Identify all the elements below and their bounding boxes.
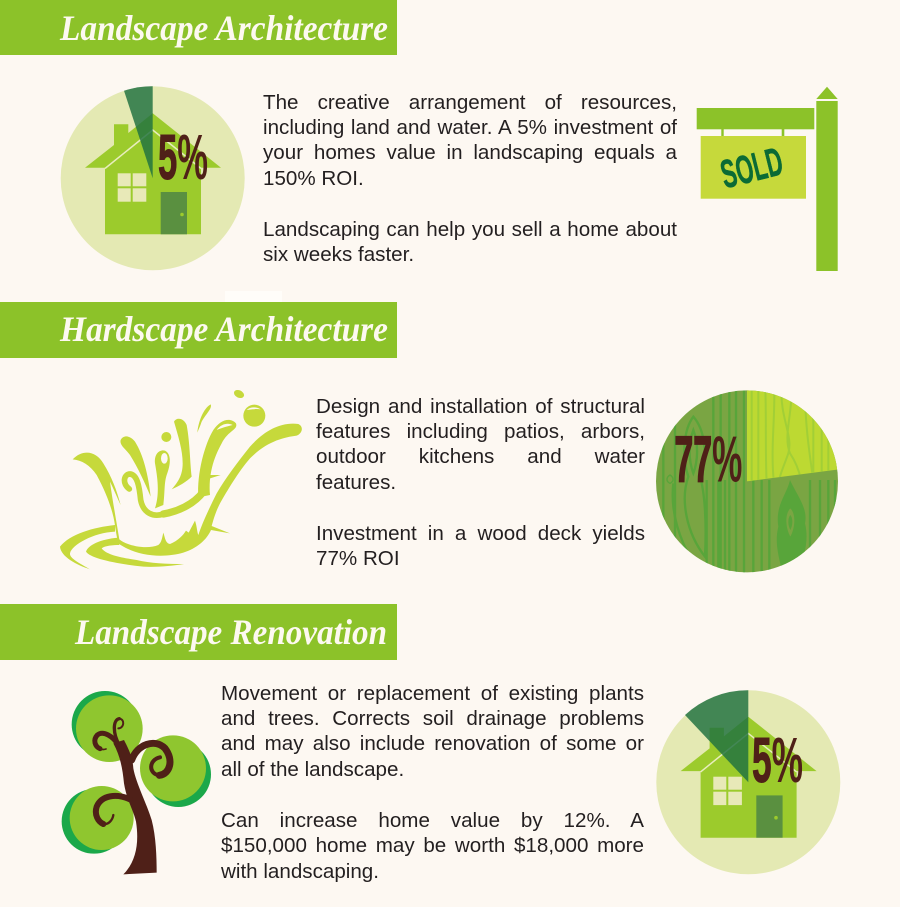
text block: landscape architecture description: your homes value in landscaping equals a (263, 141, 677, 164)
text block: landscape renovation description: all of the landscape. (221, 758, 404, 781)
text block: landscape renovation description: Movement or replacement of existing plants (221, 682, 644, 704)
heading: Landscape Renovation (0, 604, 397, 660)
text block: landscape architecture description: 150% ROI. (263, 167, 364, 190)
text block: landscape architecture description: six weeks faster. (263, 243, 414, 266)
text block: hardscape architecture description: features including patios, arbors, (316, 420, 645, 443)
icon: water splash (60, 390, 302, 570)
chart: wood pie 77%: 77% (674, 423, 742, 496)
text block: landscape architecture description: Landscaping can help you sell a home about (263, 218, 677, 241)
text block: landscape renovation description: with landscaping. (221, 860, 379, 883)
text block: hardscape architecture description: features. (316, 471, 396, 494)
text block: landscape renovation description (221, 682, 644, 883)
text block: landscape renovation description: $150,000 home may be worth $18,000 more (221, 834, 644, 857)
icon: sold sign (696, 86, 838, 271)
icon: house pie chart second 5% (656, 690, 840, 874)
text block: hardscape architecture description: Design and installation of structural (316, 394, 645, 418)
icon: house pie chart second 5%: 5% (752, 724, 803, 796)
text block: hardscape architecture description (316, 394, 645, 570)
text block: hardscape architecture description: Investment in a wood deck yields (316, 522, 645, 545)
heading: Landscape Architecture (0, 0, 397, 55)
icon: house pie chart 5%: 5% (158, 121, 208, 193)
text block: landscape architecture description: including land and water. A 5% investment of (263, 116, 677, 139)
chart: wood pie 77% (656, 390, 838, 572)
text block: landscape architecture description: The creative arrangement of resources, (263, 90, 677, 114)
decorative light strip (225, 291, 282, 302)
icon: house pie chart 5% (60, 86, 245, 270)
icon: curly tree (62, 691, 211, 874)
text block: landscape architecture description (263, 90, 677, 266)
text block: landscape renovation description: Can increase home value by 12%. A (221, 809, 644, 832)
heading: Hardscape Architecture (0, 302, 397, 358)
text block: landscape renovation description: and may also include renovation of some or (221, 732, 644, 755)
text block: hardscape architecture description: outdoor kitchens and water (316, 445, 645, 468)
text block: hardscape architecture description: 77% ROI (316, 547, 400, 570)
text block: landscape renovation description: and trees. Corrects soil drainage problems (221, 707, 644, 730)
icon: sold sign: SOLD (716, 140, 787, 197)
